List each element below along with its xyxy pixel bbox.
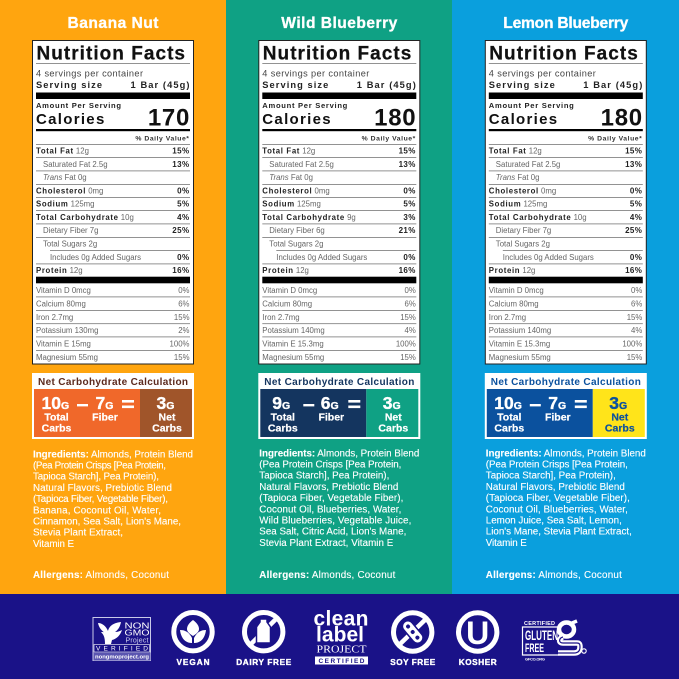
net carbohydrate calculation: Lemon Blueberry: 3G: [609, 393, 627, 413]
ingredients: Banana Nut: (Pea Protein Crisps [Pea Protein,: [33, 460, 166, 472]
nutrition facts label: Wild Blueberry: Total Sugars 2g: [269, 239, 323, 248]
badge: Certified Gluten Free: [522, 621, 586, 662]
badge: Dairy Free: [236, 612, 292, 667]
nutrition facts label: Wild Blueberry: 0%: [405, 286, 416, 295]
badge: Non GMO Project Verified: nongmoproject.org: [95, 654, 150, 660]
net carbohydrate calculation: Wild Blueberry: 6G: [321, 393, 339, 413]
certification band: [93, 608, 586, 667]
nutrition facts label: Lemon Blueberry: 0%: [631, 286, 642, 295]
nutrition facts label: Wild Blueberry: 15%: [400, 313, 416, 322]
net carbohydrate calculation: Lemon Blueberry: [485, 373, 647, 439]
nutrition facts label: Wild Blueberry: Calories: [262, 111, 332, 128]
nutrition facts label: Banana Nut: 4%: [177, 213, 190, 222]
nutrition facts label: Banana Nut: 16%: [172, 266, 190, 275]
nutrition facts label: Banana Nut: Magnesium 55mg: [36, 353, 98, 362]
nutrition facts label: Wild Blueberry: 16%: [399, 266, 416, 275]
nutrition facts label: Banana Nut: 0%: [177, 187, 190, 196]
nutrition facts label: Wild Blueberry: 6%: [405, 300, 416, 308]
net carbohydrate calculation: Banana Nut: Net: [159, 412, 176, 424]
ingredients: Wild Blueberry: Sea Salt, Citric Acid, Lion's Mane,: [259, 527, 406, 538]
net carbohydrate calculation: Banana Nut: Carbs: [152, 423, 182, 435]
nutrition facts label: Lemon Blueberry: 0%: [630, 187, 642, 196]
nutrition facts label: Wild Blueberry: 5%: [403, 200, 416, 209]
nutrition facts label: Lemon Blueberry: 4 servings per container: [489, 68, 596, 78]
nutrition facts label: Banana Nut: Vitamin D 0mcg: [36, 286, 91, 295]
net carbohydrate calculation: Wild Blueberry: 3G: [383, 393, 401, 413]
nutrition facts label: Banana Nut: Protein 12g: [36, 266, 83, 275]
nutrition facts label: Lemon Blueberry: Serving size: [489, 80, 555, 90]
nutrition facts label: Wild Blueberry: Saturated Fat 2.5g: [269, 160, 334, 169]
net carbohydrate calculation: Lemon Blueberry: Net Carbohydrate Calculation: [491, 377, 641, 388]
heading: Lemon Blueberry: Lemon Blueberry: [503, 15, 629, 32]
nutrition facts label: Lemon Blueberry: 0%: [630, 253, 642, 262]
nutrition facts label: Wild Blueberry: Dietary Fiber 6g: [269, 226, 325, 235]
net carbohydrate calculation: Lemon Blueberry: Total: [497, 412, 522, 424]
nutrition facts label: Banana Nut: Amount Per Serving: [36, 101, 121, 110]
nutrition facts label: Banana Nut: Dietary Fiber 7g: [43, 226, 98, 235]
badge: Clean Label Project Certified: label: [316, 624, 364, 647]
nutrition facts label: Wild Blueberry: Serving size: [262, 80, 328, 90]
heading: Wild Blueberry: Wild Blueberry: [281, 15, 398, 32]
badge: Clean Label Project Certified: clean: [314, 608, 368, 631]
nutrition facts label: Banana Nut: Sodium 125mg: [36, 200, 95, 209]
net carbohydrate calculation: Wild Blueberry: Carbs: [268, 423, 298, 435]
nutrition facts label: Banana Nut: % Daily Value*: [135, 136, 190, 143]
nutrition facts label: Lemon Blueberry: Total Fat 12g: [489, 147, 542, 156]
nutrition facts label: Lemon Blueberry: Potassium 140mg: [489, 326, 551, 335]
net carbohydrate calculation: Banana Nut: Fiber: [92, 412, 118, 424]
heading: Banana Nut: Banana Nut: [68, 15, 158, 32]
nutrition facts label: Banana Nut: 13%: [172, 160, 190, 169]
nutrition facts label: Banana Nut: 100%: [170, 340, 190, 348]
ingredients: Banana Nut: Banana, Coconut Oil, Water,: [33, 505, 161, 516]
ingredients: Banana Nut: Ingredients: Almonds, Protein Blend: [33, 449, 193, 460]
net carbohydrate calculation: Banana Nut: Net Carbohydrate Calculation: [38, 377, 188, 388]
nutrition facts label: Banana Nut: Calcium 80mg: [36, 300, 86, 308]
nutrition facts label: Lemon Blueberry: 1 Bar (45g): [583, 80, 642, 90]
nutrition facts label: Lemon Blueberry: [485, 40, 646, 364]
nutrition facts label: Wild Blueberry: 15%: [400, 353, 416, 362]
net carbohydrate calculation: Wild Blueberry: Carbs: [378, 423, 408, 435]
badge: Certified Gluten Free: GLUTEN: [525, 627, 558, 643]
nutrition facts label: Wild Blueberry: 1 Bar (45g): [357, 80, 416, 90]
net carbohydrate calculation: Banana Nut: Carbs: [42, 423, 72, 435]
nutrition facts label: Wild Blueberry: 3%: [403, 213, 416, 222]
ingredients: Wild Blueberry: (Tapioca Fiber, Vegetable Fiber),: [259, 493, 403, 504]
nutrition facts label: Lemon Blueberry: 15%: [627, 353, 642, 362]
nutrition facts label: Wild Blueberry: Cholesterol 0mg: [262, 187, 330, 196]
panel: Wild Blueberry: [258, 15, 422, 581]
net carbohydrate calculation: Banana Nut: Total: [44, 412, 69, 424]
nutrition facts label: Wild Blueberry: 0%: [403, 187, 416, 196]
nutrition facts label: Banana Nut: 1 Bar (45g): [130, 80, 190, 90]
net carbohydrate calculation: Wild Blueberry: Fiber: [318, 412, 344, 424]
nutrition facts label: Banana Nut: 25%: [172, 226, 190, 235]
nutrition facts label: Lemon Blueberry: Total Carbohydrate 10g: [489, 213, 587, 222]
nutrition facts label: Lemon Blueberry: Iron 2.7mg: [489, 313, 526, 322]
nutrition facts label: Lemon Blueberry: 15%: [627, 313, 642, 322]
nutrition facts label: Banana Nut: Trans Fat 0g: [43, 173, 87, 182]
nutrition facts label: Banana Nut: Total Sugars 2g: [43, 239, 97, 248]
nutrition facts label: Lemon Blueberry: 15%: [625, 147, 642, 156]
badge: Certified Gluten Free: GFCO.ORG: [525, 656, 545, 662]
nutrition facts label: Lemon Blueberry: Trans Fat 0g: [496, 173, 539, 182]
nutrition facts label: Wild Blueberry: Vitamin E 15.3mg: [262, 340, 324, 348]
nutrition facts label: Banana Nut: 0%: [178, 286, 190, 295]
badge: Vegan: VEGAN: [176, 658, 210, 667]
badge: Soy Free: SOY FREE: [390, 658, 436, 667]
nutrition facts label: Lemon Blueberry: 4%: [630, 213, 642, 222]
net carbohydrate calculation: Lemon Blueberry: Net: [611, 412, 629, 424]
ingredients: Banana Nut: Stevia Plant Extract,: [33, 528, 123, 539]
nutrition facts label: Lemon Blueberry: Dietary Fiber 7g: [496, 226, 551, 235]
nutrition facts label: Banana Nut: Calories: [36, 111, 106, 128]
net carbohydrate calculation: Lemon Blueberry: Fiber: [545, 412, 571, 424]
ingredients: Banana Nut: (Tapioca Fiber, Vegetable Fiber),: [33, 494, 168, 505]
badge: Kosher: U: [466, 615, 489, 651]
ingredients: Wild Blueberry: Tapioca Starch], Pea Protein),: [259, 471, 389, 482]
badge: Clean Label Project Certified: [314, 608, 368, 665]
nutrition facts label: Wild Blueberry: 100%: [396, 340, 416, 348]
nutrition facts label: Wild Blueberry: 21%: [399, 226, 416, 235]
nutrition facts label: Lemon Blueberry: 100%: [622, 340, 642, 348]
badge: Clean Label Project Certified: PROJECT: [316, 645, 367, 656]
nutrition facts label: Banana Nut: Vitamin E 15mg: [36, 340, 91, 348]
net carbohydrate calculation: Banana Nut: 7G: [96, 393, 113, 413]
nutrition facts label: Banana Nut: 15%: [174, 313, 190, 322]
nutrition facts label: Lemon Blueberry: Vitamin E 15.3mg: [489, 340, 550, 348]
ingredients: Banana Nut: Tapioca Starch], Pea Protein),: [33, 472, 159, 483]
ingredients: Lemon Blueberry: Coconut Oil, Blueberries, Water,: [486, 504, 628, 515]
nutrition facts label: Lemon Blueberry: 180: [601, 104, 643, 132]
badge: Non GMO Project Verified: [93, 618, 150, 660]
nutrition facts label: Wild Blueberry: 13%: [399, 160, 416, 169]
net carbohydrate calculation: Wild Blueberry: 9G: [272, 393, 290, 413]
badge: Non GMO Project Verified: VERIFIED: [96, 646, 148, 653]
nutrition facts label: Wild Blueberry: 4 servings per container: [262, 68, 369, 78]
ingredients: Banana Nut: Cinnamon, Sea Salt, Lion's Mane,: [33, 516, 181, 528]
ingredients: Banana Nut: Natural Flavors, Prebiotic Blend: [33, 483, 172, 494]
nutrition facts label: Banana Nut: 15%: [174, 353, 190, 362]
allergens: Lemon Blueberry: Allergens: Almonds, Coconut: [486, 570, 622, 581]
ingredients: Lemon Blueberry: Natural Flavors, Prebiotic Blend: [486, 482, 625, 493]
nutrition facts label: Wild Blueberry: Potassium 140mg: [262, 326, 325, 335]
nutrition facts label: Banana Nut: 170: [148, 104, 190, 132]
nutrition facts label: Wild Blueberry: [259, 40, 420, 364]
nutrition facts label: Lemon Blueberry: 16%: [625, 266, 642, 275]
nutrition facts label: Wild Blueberry: 4%: [405, 326, 416, 335]
nutrition facts label: Banana Nut: Cholesterol 0mg: [36, 187, 103, 196]
net carbohydrate calculation: Lemon Blueberry: Carbs: [605, 423, 635, 435]
nutrition facts label: Wild Blueberry: Nutrition Facts: [263, 44, 411, 64]
nutrition facts label: Lemon Blueberry: 5%: [630, 200, 642, 209]
badge: Kosher: KOSHER: [459, 658, 497, 667]
net carbohydrate calculation: Lemon Blueberry: Carbs: [494, 423, 524, 435]
nutrition facts label: Lemon Blueberry: Saturated Fat 2.5g: [496, 160, 560, 169]
ingredients: Lemon Blueberry: (Pea Protein Crisps [Pea Protein,: [486, 460, 628, 470]
nutrition facts label: Wild Blueberry: Sodium 125mg: [262, 200, 321, 209]
nutrition facts label: Lemon Blueberry: Cholesterol 0mg: [489, 187, 556, 196]
ingredients: Wild Blueberry: Natural Flavors, Prebiotic Blend: [259, 482, 398, 493]
ingredients: Lemon Blueberry: Vitamin E: [486, 538, 527, 549]
nutrition facts label: Wild Blueberry: Trans Fat 0g: [269, 173, 313, 182]
nutrition facts label: Lemon Blueberry: 13%: [625, 160, 642, 169]
nutrition facts label: Wild Blueberry: 15%: [399, 147, 416, 156]
nutrition facts label: Wild Blueberry: Total Carbohydrate 9g: [262, 213, 356, 222]
nutrition facts label: Lemon Blueberry: Nutrition Facts: [489, 44, 638, 64]
badge: Non GMO Project Verified: NON: [124, 620, 150, 630]
ingredients: Wild Blueberry: Coconut Oil, Blueberries, Water,: [259, 504, 401, 515]
badge: Soy Free: [390, 613, 436, 667]
nutrition facts label: Wild Blueberry: % Daily Value*: [362, 136, 416, 143]
ingredients: Wild Blueberry: Ingredients: Almonds, Protein Blend: [259, 448, 419, 459]
nutrition facts label: Lemon Blueberry: Total Sugars 2g: [496, 239, 550, 248]
badge: Certified Gluten Free: FREE: [525, 641, 544, 655]
nutrition facts label: Banana Nut: 15%: [172, 147, 190, 156]
nutrition facts label: Banana Nut: [32, 40, 194, 364]
ingredients: Wild Blueberry: Wild Blueberries, Vegetable Juice,: [259, 516, 411, 526]
net carbohydrate calculation: Banana Nut: [32, 373, 194, 439]
nutrition facts label: Lemon Blueberry: Protein 12g: [489, 266, 535, 275]
net carbohydrate calculation: Banana Nut: 10G: [42, 393, 69, 413]
nutrition facts label: Lemon Blueberry: Magnesium 55mg: [489, 353, 551, 362]
ingredients: Wild Blueberry: Stevia Plant Extract, Vitamin E: [259, 538, 394, 549]
nutrition facts label: Banana Nut: Nutrition Facts: [36, 44, 185, 64]
nutrition facts label: Wild Blueberry: 180: [374, 104, 416, 132]
ingredients: Wild Blueberry: (Pea Protein Crisps [Pea Protein,: [259, 460, 401, 470]
badge: Dairy Free: DAIRY FREE: [236, 658, 292, 667]
nutrition facts label: Lemon Blueberry: Includes 0g Added Sugars: [503, 253, 594, 262]
nutrition facts label: Wild Blueberry: 0%: [403, 253, 416, 262]
nutrition facts label: Wild Blueberry: Calcium 80mg: [262, 300, 312, 308]
nutrition facts label: Lemon Blueberry: 25%: [625, 226, 642, 235]
nutrition facts label: Lemon Blueberry: 4%: [631, 326, 642, 335]
badge: Certified Gluten Free: CERTIFIED: [524, 621, 555, 627]
nutrition facts label: Wild Blueberry: Amount Per Serving: [262, 101, 348, 110]
nutrition facts label: Lemon Blueberry: Calcium 80mg: [489, 300, 539, 308]
ingredients: Lemon Blueberry: Tapioca Starch], Pea Protein),: [486, 471, 616, 482]
badge: Non GMO Project Verified: GMO: [124, 628, 150, 638]
nutrition facts label: Banana Nut: Total Carbohydrate 10g: [36, 213, 134, 222]
net carbohydrate calculation: Wild Blueberry: Total: [271, 412, 295, 424]
allergens: Banana Nut: Allergens: Almonds, Coconut: [33, 570, 169, 581]
panel: Banana Nut: [32, 15, 196, 581]
net carbohydrate calculation: Wild Blueberry: Net: [385, 412, 402, 424]
nutrition facts label: Lemon Blueberry: Vitamin D 0mcg: [489, 286, 544, 295]
nutrition facts label: Lemon Blueberry: Sodium 125mg: [489, 200, 547, 209]
badge: Kosher: [458, 613, 497, 667]
nutrition facts label: Wild Blueberry: Total Fat 12g: [262, 147, 315, 156]
nutrition facts label: Wild Blueberry: Protein 12g: [262, 266, 309, 275]
nutrition facts label: Banana Nut: Total Fat 12g: [36, 147, 89, 156]
nutrition facts label: Lemon Blueberry: % Daily Value*: [588, 136, 642, 143]
badge: Non GMO Project Verified: Project: [126, 637, 149, 644]
ingredients: Lemon Blueberry: (Tapioca Fiber, Vegetable Fiber),: [486, 493, 630, 504]
nutrition facts label: Banana Nut: Includes 0g Added Sugars: [50, 253, 141, 262]
ingredients: Lemon Blueberry: Ingredients: Almonds, Protein Blend: [486, 448, 646, 459]
net carbohydrate calculation: Banana Nut: 3G: [156, 393, 174, 413]
net carbohydrate calculation: Lemon Blueberry: 10G: [494, 393, 522, 413]
nutrition facts label: Banana Nut: 4 servings per container: [36, 68, 143, 78]
nutrition facts label: Lemon Blueberry: Amount Per Serving: [489, 101, 574, 110]
net carbohydrate calculation: Lemon Blueberry: 7G: [548, 393, 566, 413]
nutrition facts label: Wild Blueberry: Includes 0g Added Sugars: [276, 253, 367, 262]
nutrition facts label: Lemon Blueberry: Calories: [489, 111, 558, 128]
nutrition facts label: Banana Nut: Saturated Fat 2.5g: [43, 160, 108, 169]
nutrition facts label: Banana Nut: Iron 2.7mg: [36, 313, 73, 322]
badge: Vegan: [174, 612, 212, 667]
ingredients: Lemon Blueberry: Lemon Juice, Sea Salt, Lemon,: [486, 516, 622, 526]
net carbohydrate calculation: Wild Blueberry: Net Carbohydrate Calculation: [264, 377, 414, 388]
ingredients: Lemon Blueberry: Lion's Mane, Stevia Plant Extract,: [486, 527, 632, 538]
nutrition facts label: Banana Nut: 5%: [177, 200, 190, 209]
badge: Clean Label Project Certified: CERTIFIED: [318, 658, 365, 665]
nutrition facts label: Wild Blueberry: Vitamin D 0mcg: [262, 286, 317, 295]
nutrition facts label: Banana Nut: 2%: [178, 326, 190, 335]
allergens: Wild Blueberry: Allergens: Almonds, Coconut: [259, 570, 396, 581]
nutrition facts label: Banana Nut: 0%: [177, 253, 190, 262]
nutrition facts label: Lemon Blueberry: 6%: [631, 300, 642, 308]
nutrition facts label: Banana Nut: 6%: [178, 300, 190, 308]
nutrition facts label: Wild Blueberry: Iron 2.7mg: [262, 313, 300, 322]
ingredients: Banana Nut: Vitamin E: [33, 539, 74, 550]
nutrition facts label: Banana Nut: Serving size: [36, 80, 102, 90]
nutrition facts label: Banana Nut: Potassium 130mg: [36, 326, 98, 335]
panel: Lemon Blueberry: [485, 15, 649, 581]
net carbohydrate calculation: Wild Blueberry: [258, 373, 420, 439]
nutrition facts label: Wild Blueberry: Magnesium 55mg: [262, 353, 324, 362]
